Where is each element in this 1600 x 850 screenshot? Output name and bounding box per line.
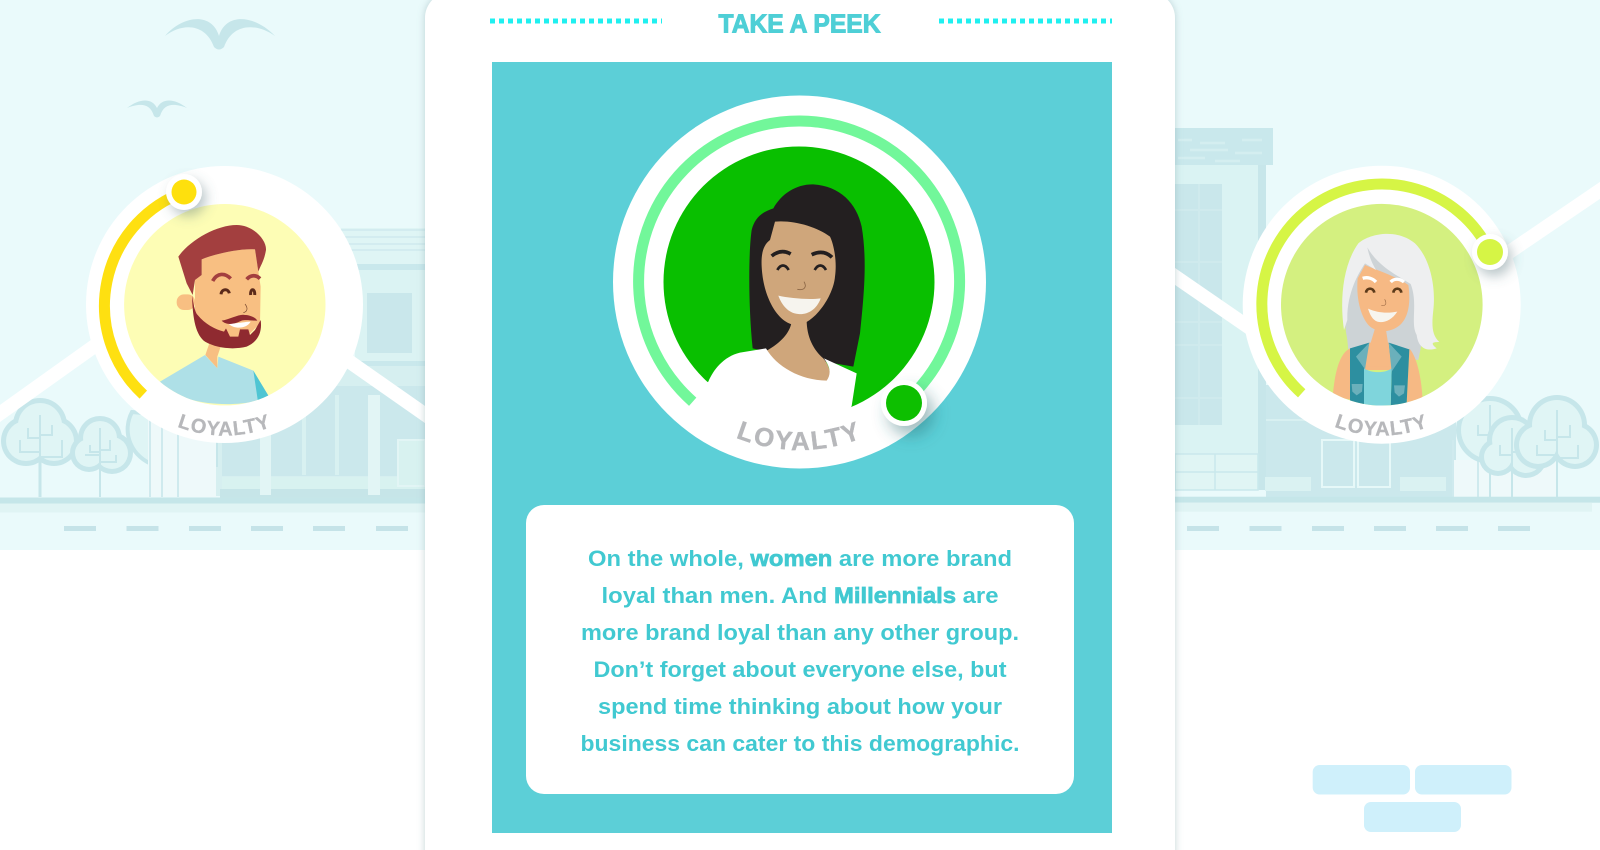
shop with double door	[1265, 385, 1558, 497]
portrait: silver-haired woman	[1333, 234, 1439, 407]
white disc	[613, 96, 986, 468]
road right	[1175, 497, 1600, 531]
panel: teal content area	[492, 62, 1112, 833]
loyalty gauge arc	[1262, 184, 1490, 393]
label: LOYALTY	[1335, 414, 1424, 436]
right street scene	[1175, 128, 1600, 531]
left street scene	[0, 228, 442, 531]
portrait: bearded man	[160, 225, 269, 404]
decorative light-blue brick buttons	[1313, 765, 1512, 832]
heading: TAKE A PEEK	[718, 8, 881, 38]
loyalty gauge arc	[639, 121, 960, 403]
gauge knob	[166, 174, 202, 210]
green portrait background	[664, 146, 934, 418]
text block: loyalty takeaway: On the whole, women are more brand	[588, 546, 1012, 571]
icon: small bird	[127, 100, 187, 118]
text block: loyalty takeaway: Don’t forget about everyone else, but	[594, 657, 1007, 682]
persona: young woman with loyalty gauge	[613, 96, 986, 468]
loyalty gauge arc	[104, 192, 184, 395]
lime portrait background	[1281, 204, 1483, 406]
white disc	[1243, 166, 1521, 444]
text block: loyalty takeaway: more brand loyal than any other group.	[581, 620, 1019, 645]
sky background band	[0, 0, 1600, 550]
text block: loyalty takeaway: spend time thinking about how your	[598, 694, 1002, 719]
white disc	[86, 166, 363, 443]
icon: large bird	[165, 19, 275, 50]
tree cluster right	[1456, 395, 1599, 497]
yellow portrait background	[124, 204, 326, 405]
persona: man with loyalty gauge	[86, 166, 363, 443]
text block: loyalty takeaway: loyal than men. And Millennials are	[602, 583, 999, 608]
gauge knob	[1472, 234, 1508, 270]
dotted rule left	[490, 18, 662, 24]
tree cluster left	[1, 398, 133, 497]
tower building	[1175, 128, 1273, 490]
text block: loyalty takeaway: business can cater to this demographic.	[580, 731, 1020, 756]
text block: loyalty takeaway	[526, 505, 1074, 794]
gauge knob	[881, 380, 927, 426]
dotted rule right	[939, 18, 1112, 24]
panel: main white card	[421, 0, 1179, 850]
trend line connecting personas	[0, 187, 1600, 418]
label: LOYALTY	[737, 421, 856, 450]
persona: older woman with loyalty gauge	[1242, 166, 1520, 444]
storefront left	[128, 228, 442, 498]
label: LOYALTY	[178, 414, 267, 436]
portrait: dark-haired woman	[680, 184, 865, 437]
road left	[0, 498, 425, 531]
